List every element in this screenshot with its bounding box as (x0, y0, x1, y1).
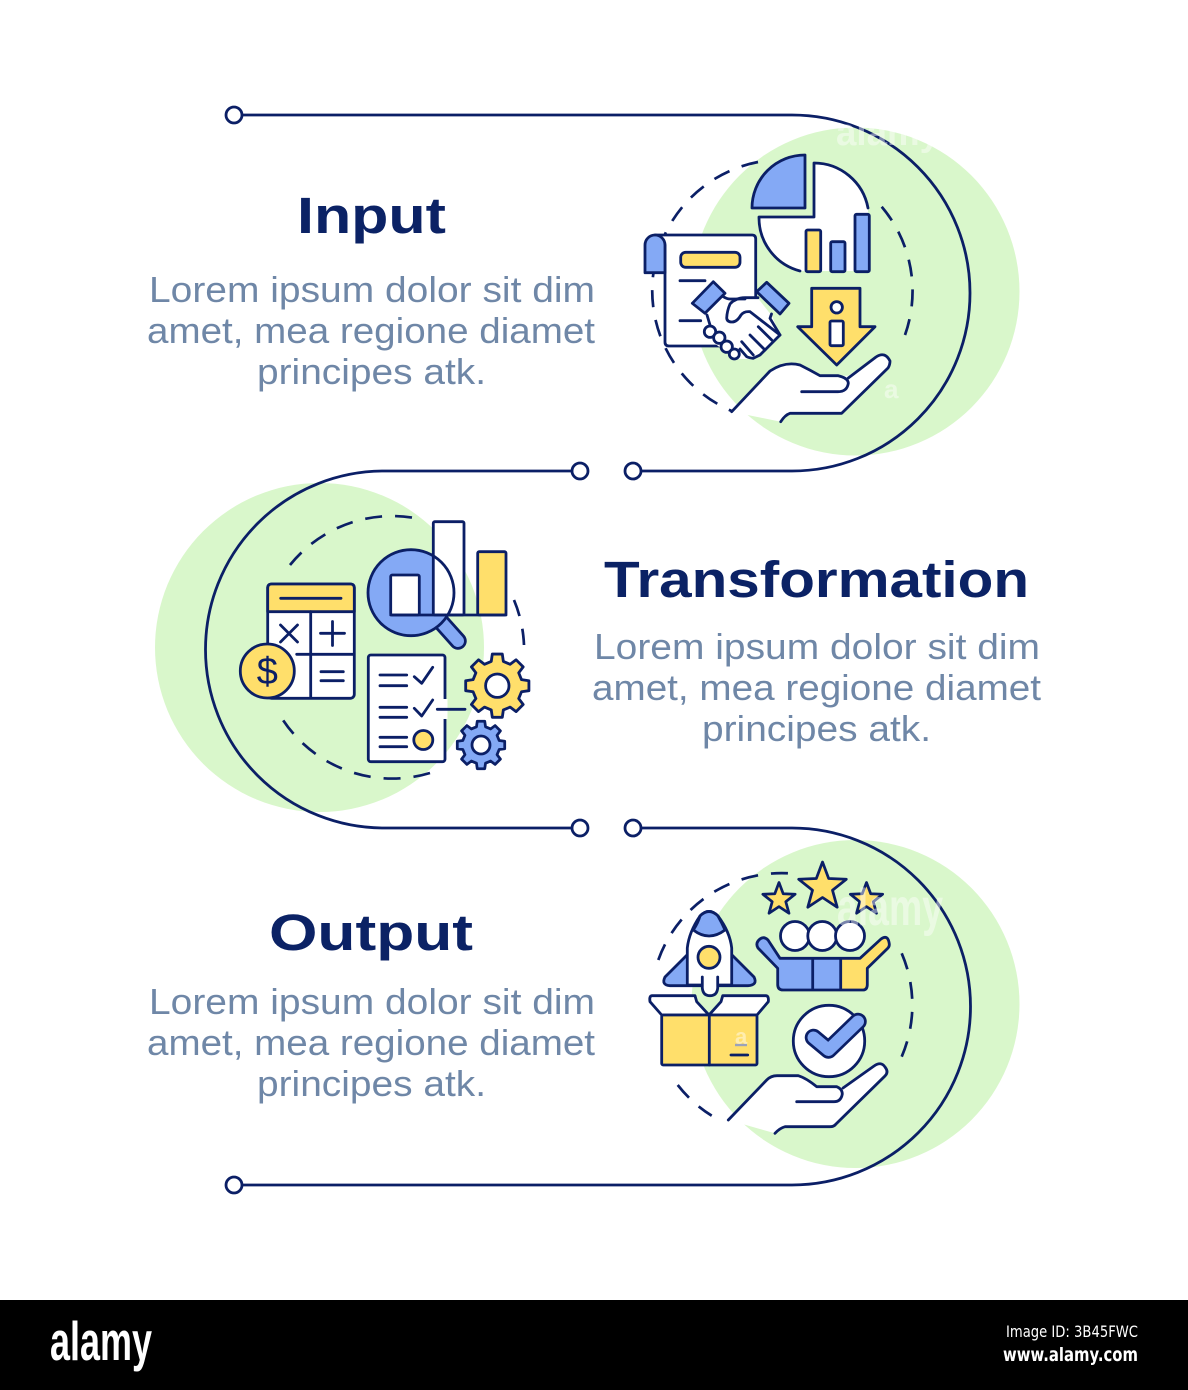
icon: calculator (268, 584, 354, 698)
icon: open box (650, 996, 768, 1065)
panel: transformation text (592, 551, 1041, 749)
panel: output text (147, 904, 595, 1104)
text block: output: principes atk. (257, 1063, 486, 1104)
text block: transformation: Lorem ipsum dolor sit dim (594, 626, 1040, 667)
website: www.alamy.com (1003, 1344, 1138, 1366)
icon: open hand (732, 354, 890, 422)
icon: document (645, 235, 756, 346)
icon: yellow gear (466, 654, 529, 717)
icon: handshake (692, 282, 789, 359)
icon group: output (650, 862, 912, 1133)
green circle: output (692, 840, 1020, 1168)
footer logo: alamy (50, 1310, 152, 1372)
text block: input: principes atk. (257, 351, 486, 392)
icon group: input (645, 155, 913, 422)
icon: pie chart with bars (752, 155, 869, 272)
connector line: output (226, 820, 971, 1193)
icon: dollar coin (240, 644, 294, 698)
text block: output (147, 981, 595, 1104)
watermark text: alamy (836, 112, 940, 154)
connector line: transformation (206, 463, 588, 836)
text block: input: amet, mea regione diamet (147, 310, 595, 351)
watermark text: a (884, 374, 899, 404)
icon: checklist (368, 655, 465, 762)
text block: transformation (592, 626, 1041, 749)
icon: bar chart with magnifier (368, 522, 506, 641)
icon group: transformation (240, 516, 529, 779)
text block: input (147, 269, 595, 392)
icon: blue gear (457, 721, 505, 769)
connector line: input (226, 107, 970, 479)
icon: rocket (664, 912, 755, 996)
text block: output: Lorem ipsum dolor sit dim (149, 981, 595, 1022)
green circle: input (692, 128, 1020, 456)
icon: check badge (793, 1005, 865, 1077)
icon: team (757, 922, 889, 990)
heading: input: Input (297, 187, 446, 244)
icon: download info arrow (798, 288, 875, 365)
watermark text (735, 112, 943, 1049)
footer banner (0, 1300, 1188, 1390)
heading: output: Output (269, 904, 473, 961)
text block: output: amet, mea regione diamet (147, 1022, 595, 1063)
icon: open hand (728, 1063, 887, 1133)
watermark text: alamy (837, 879, 943, 937)
text block: transformation: principes atk. (702, 708, 931, 749)
icon: stars (763, 862, 883, 913)
dashed ring (283, 516, 524, 779)
dashed ring (658, 873, 912, 1116)
image id: Image ID: 3B45FWC (1006, 1322, 1138, 1341)
dashed ring (652, 162, 913, 411)
green circle: transformation (155, 483, 484, 812)
text block: transformation: amet, mea regione diamet (592, 667, 1041, 708)
icon: dollar coin: $ (257, 651, 278, 693)
watermark text: a (735, 1024, 748, 1049)
text block: input: Lorem ipsum dolor sit dim (149, 269, 595, 310)
heading: transformation: Transformation (604, 551, 1029, 608)
panel: input text (147, 187, 595, 392)
